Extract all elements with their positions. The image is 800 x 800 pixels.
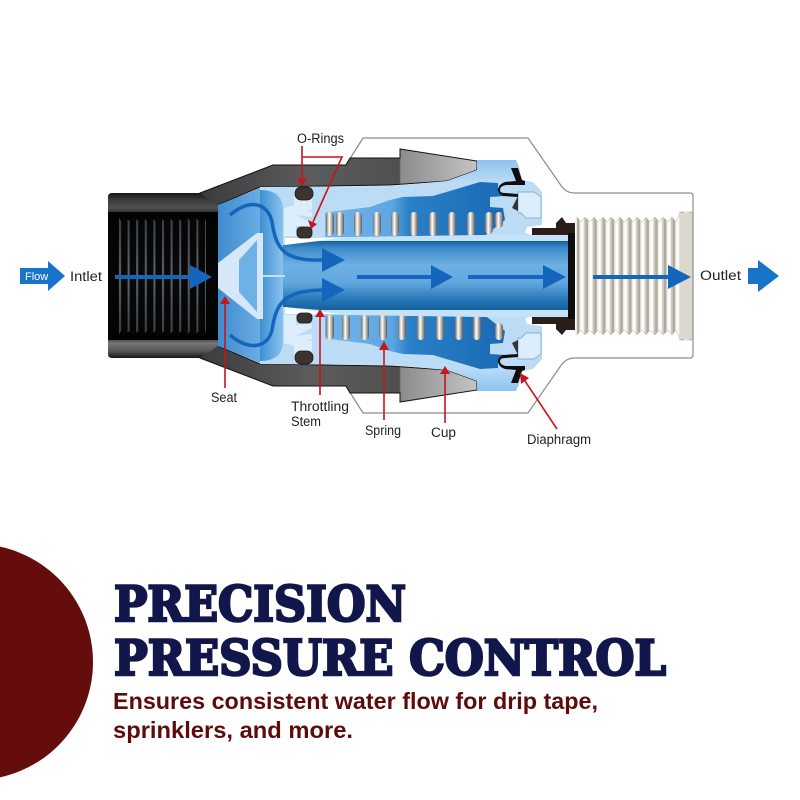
subtitle: Ensures consistent water flow for drip tape, (113, 688, 598, 714)
flow tag arrow: Flow (25, 271, 48, 283)
subtitle: sprinklers, and more. (113, 717, 353, 743)
outlet nut (532, 217, 575, 335)
label: Spring: Spring (365, 423, 401, 438)
flow arrow: lower curve (230, 278, 345, 346)
label: Throttling Stem: Stem (291, 414, 321, 429)
springs top (326, 212, 503, 236)
metal inlet end (108, 193, 218, 358)
label: Intlet: Intlet (70, 269, 102, 284)
title (114, 575, 666, 687)
inlet threads (108, 212, 218, 340)
label: Throttling Stem: Throttling (291, 399, 349, 414)
diaphragm top (498, 168, 525, 211)
label: Diaphragm: Diaphragm (527, 432, 591, 447)
seat chamber (218, 188, 260, 363)
flow arrow: inlet (115, 265, 212, 289)
flow tag arrow (20, 261, 65, 291)
housing outline (346, 138, 693, 413)
throttling stem tube (283, 235, 568, 317)
spring chamber top (325, 182, 505, 237)
leader: spring (379, 341, 389, 420)
leader: diaphragm (520, 373, 557, 429)
label: Outlet: Outlet (700, 268, 741, 283)
spring chamber bottom (325, 314, 505, 369)
diagram: regulator cross-section (108, 138, 693, 413)
title: PRESSURE CONTROL (114, 629, 666, 687)
diaphragm bottom (498, 340, 525, 383)
cap inserts (518, 192, 541, 359)
light blue cup body (260, 160, 568, 391)
flow arrow: upper curve (230, 205, 345, 272)
leader: cup (440, 366, 450, 423)
outlet blue arrow (748, 260, 779, 292)
label: O-Rings: O-Rings (297, 131, 344, 146)
flow arrow: stem 1 (357, 265, 453, 289)
o-ring seat grooves (284, 189, 312, 236)
title: PRECISION (114, 575, 406, 633)
flow arrow: outlet (593, 265, 691, 289)
outlet threads (577, 212, 692, 340)
leader: o-rings (297, 146, 342, 229)
leader: throttling stem (315, 309, 325, 395)
seat (218, 233, 263, 319)
subtitle (113, 688, 598, 743)
springs bottom (326, 315, 503, 340)
leader: seat (220, 296, 230, 388)
flow arrow: stem 2 (468, 265, 566, 289)
o-rings (295, 187, 313, 364)
label: Seat: Seat (211, 390, 237, 405)
metal body (200, 149, 477, 402)
decorative circle (0, 544, 93, 780)
label: Cup: Cup (431, 425, 456, 440)
